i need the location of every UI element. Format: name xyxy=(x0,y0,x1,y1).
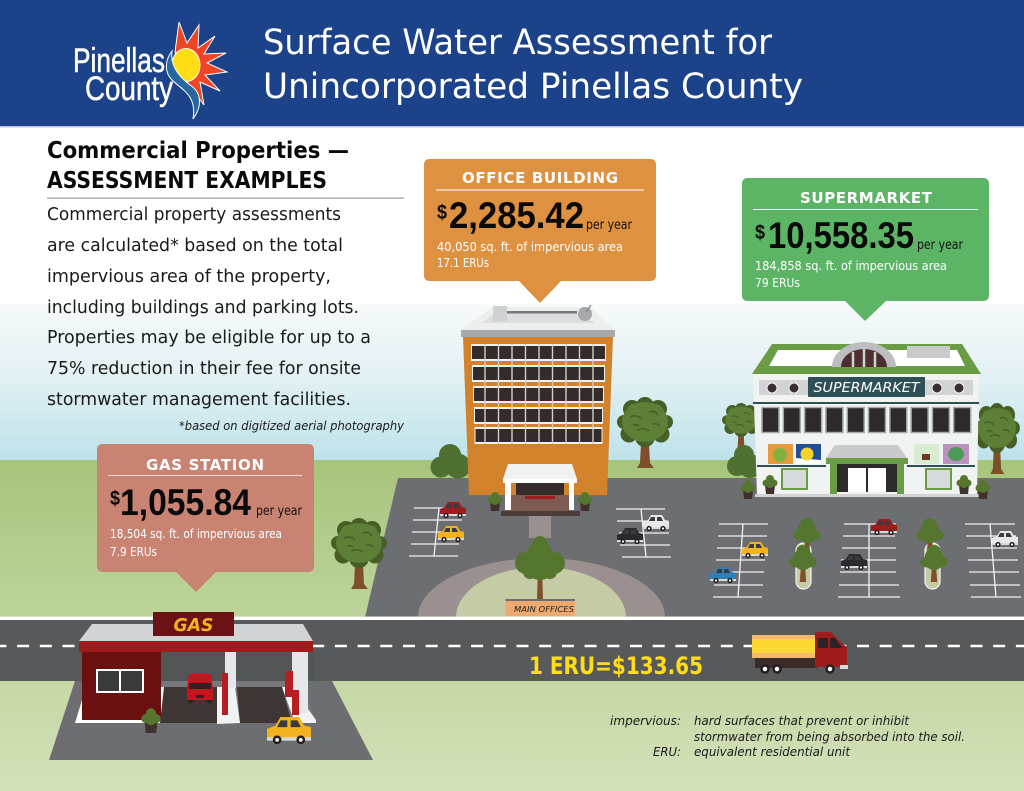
callout: office building: $ xyxy=(437,202,447,224)
main title: Unincorporated Pinellas County xyxy=(263,67,803,107)
tree beside office xyxy=(617,397,673,468)
red car at pump xyxy=(187,674,213,702)
definitions: equivalent residential unit xyxy=(694,745,851,759)
body text: are calculated* based on the total xyxy=(47,235,343,256)
body text: Properties may be eligible for up to a xyxy=(47,327,371,348)
callout: gas station: 1,055.84 xyxy=(120,482,251,523)
fuel pumps xyxy=(222,671,299,715)
gas sign: GAS xyxy=(174,615,214,636)
parking lot xyxy=(365,478,1024,617)
ERU rate: 1 ERU=$133.65 xyxy=(529,652,703,680)
center tree xyxy=(515,536,565,601)
main title: Surface Water Assessment for xyxy=(263,23,773,63)
body text xyxy=(47,204,371,410)
yellow car at station xyxy=(267,717,311,744)
callout: gas station: per year xyxy=(256,504,303,519)
logo: Pinellas County: Pinellas xyxy=(73,42,165,80)
callout: office building: 17.1 ERUs xyxy=(437,256,489,270)
supermarket xyxy=(740,342,990,499)
callout: office building: OFFICE BUILDING xyxy=(462,169,618,187)
callout: office building: per year xyxy=(586,218,633,233)
callout: supermarket: per year xyxy=(917,238,964,253)
section heading xyxy=(47,138,404,199)
header banner xyxy=(0,0,1024,128)
gas sign xyxy=(153,612,234,636)
definitions xyxy=(610,714,965,759)
office building xyxy=(461,305,615,516)
definitions: impervious: xyxy=(610,714,681,728)
posters xyxy=(768,444,969,464)
gas station building xyxy=(82,652,161,720)
body text: 75% reduction in their fee for onsite xyxy=(47,358,361,379)
callout: supermarket: SUPERMARKET xyxy=(800,189,933,207)
supermarket entrance xyxy=(826,445,908,496)
callout: supermarket: 10,558.35 xyxy=(768,215,914,256)
truck xyxy=(752,632,848,672)
side panels xyxy=(782,469,951,489)
logo: Pinellas County xyxy=(73,22,227,119)
callout: gas station: GAS STATION xyxy=(146,456,264,474)
cars in parking lot xyxy=(438,502,1018,583)
supermarket sign xyxy=(808,377,925,397)
callout: gas station: 7.9 ERUs xyxy=(110,545,157,559)
gas station pump bays xyxy=(75,687,316,724)
section heading: Commercial Properties — xyxy=(47,138,349,164)
callout: supermarket: $ xyxy=(755,222,765,244)
trees beside supermarket xyxy=(722,403,1020,478)
callout: supermarket: 79 ERUs xyxy=(755,276,800,290)
supermarket sign: SUPERMARKET xyxy=(814,381,921,396)
body text: impervious area of the property, xyxy=(47,266,331,287)
callout: gas station: $ xyxy=(110,488,120,510)
driveway and walkway xyxy=(418,516,665,617)
supermarket windows xyxy=(762,408,971,432)
body text: stormwater management facilities. xyxy=(47,389,351,410)
callout: gas station xyxy=(97,444,314,592)
main title xyxy=(263,23,803,107)
section heading: ASSESSMENT EXAMPLES xyxy=(47,168,327,194)
office windows xyxy=(471,344,606,444)
tree beside gas station xyxy=(331,518,387,589)
canopy xyxy=(79,624,313,641)
callout: gas station: 18,504 sq. ft. of impervious area xyxy=(110,527,282,541)
main offices sign: MAIN OFFICES xyxy=(514,605,574,614)
parking lot islands and trees xyxy=(789,518,948,589)
body text: Commercial property assessments xyxy=(47,204,341,225)
callout: office building xyxy=(424,159,656,303)
footnote: *based on digitized aerial photography xyxy=(179,419,405,433)
callout: office building: 2,285.42 xyxy=(449,195,584,236)
callout: supermarket xyxy=(742,178,989,321)
road xyxy=(0,616,1024,681)
definitions: hard surfaces that prevent or inhibit xyxy=(694,714,910,728)
bush beside office xyxy=(430,444,470,478)
main offices sign xyxy=(506,599,575,616)
logo: Pinellas County: County xyxy=(85,70,173,108)
dome xyxy=(832,342,896,367)
callout: office building: 40,050 sq. ft. of impervious area xyxy=(437,240,623,254)
parking lines xyxy=(409,508,1021,597)
office entrance xyxy=(501,464,580,516)
definitions: stormwater from being absorbed into the soil. xyxy=(694,730,965,744)
callout: supermarket: 184,858 sq. ft. of impervious area xyxy=(755,259,947,273)
definitions: ERU: xyxy=(653,745,681,759)
body text: including buildings and parking lots. xyxy=(47,297,359,318)
gas station xyxy=(49,612,373,760)
